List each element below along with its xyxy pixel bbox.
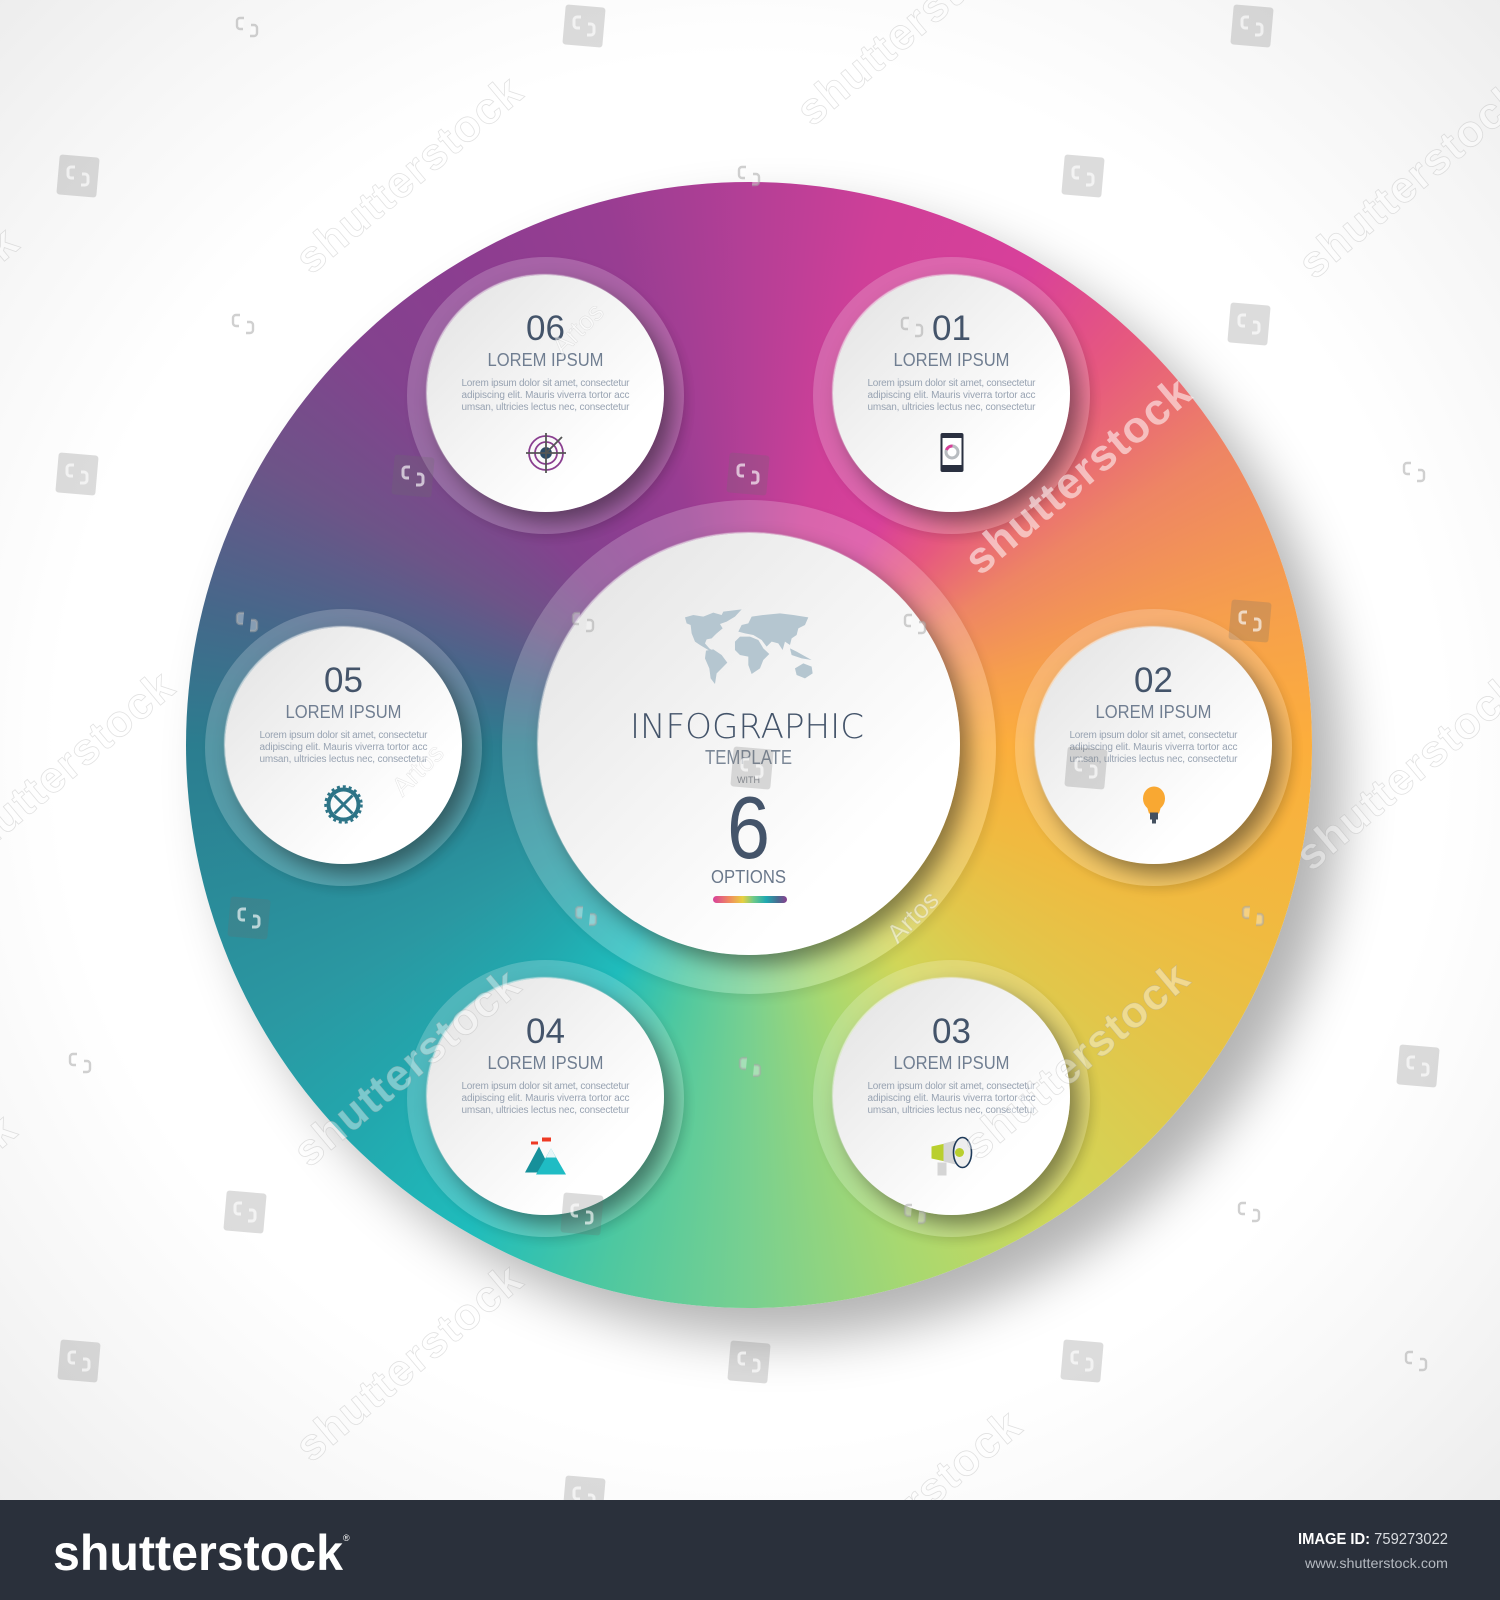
footer url: www.shutterstock.com [1304,1555,1448,1571]
watermark layer: shutterstock [286,1254,532,1471]
panel: option 01 [812,257,1090,534]
number 02: 02 [1134,660,1173,700]
footer logo registered mark: ® [343,1533,350,1543]
icon: target [526,433,566,473]
number 03: 03 [932,1012,970,1050]
body text 05: Lorem ipsum dolor sit amet, consectetur [259,730,428,740]
title: INFOGRAPHIC [630,707,864,747]
watermark layer: shutterstock [286,66,532,283]
watermark layer: Artos [386,738,450,802]
big number 6: 6 [727,778,770,877]
heading 05: LOREM IPSUM [285,702,401,722]
body text 02: Lorem ipsum dolor sit amet, consectetur [1070,730,1238,740]
body text 01 [867,378,1036,413]
panel: center circle [502,500,996,994]
icon: megaphone [931,1136,971,1175]
rainbow bar [713,896,787,903]
body text 03: Lorem ipsum dolor sit amet, consectetur [867,1080,1036,1092]
footer image id: IMAGE ID: 759273022 [1298,1531,1448,1548]
body text 06: umsan, ultricies lectus nec, consectetur [462,402,630,413]
watermark layer: Artos [881,885,945,949]
body text 03: adipiscing elit. Mauris viverra tortor acc [867,1092,1035,1104]
footer bar [0,1500,1500,1600]
subtitle: template: TEMPLATE [705,747,792,769]
body text 05: adipiscing elit. Mauris viverra tortor acc [259,742,427,752]
body text 04 [462,1080,630,1116]
text: options: OPTIONS [711,867,786,887]
icon: world map [685,609,813,684]
body text 01: Lorem ipsum dolor sit amet, consectetur [867,378,1036,389]
watermark layer: shutterstock [955,367,1201,584]
body text 04: umsan, ultricies lectus nec, consectetur [462,1104,630,1116]
body text 02: adipiscing elit. Mauris viverra tortor acc [1070,742,1238,752]
body text 03: umsan, ultricies lectus nec, consectetur [867,1104,1036,1116]
body text 06: Lorem ipsum dolor sit amet, consectetur [462,378,630,389]
text: with: WITH [737,775,760,786]
body text 04: Lorem ipsum dolor sit amet, consectetur [462,1080,630,1092]
body text 05 [259,730,428,764]
heading 04: LOREM IPSUM [488,1052,604,1072]
watermark layer: shutterstock [953,952,1199,1169]
panel: option 04 [407,960,684,1236]
watermark layer: shutterstock [284,959,530,1176]
heading 01: LOREM IPSUM [893,350,1009,370]
body text 01: adipiscing elit. Mauris viverra tortor acc [867,390,1035,401]
icon: mountains with flags [525,1137,566,1174]
icon: phone [940,433,963,472]
icon: light bulb [1143,786,1165,823]
number 04: 04 [526,1012,565,1050]
footer logo: shutterstock [53,1525,343,1581]
body text 02: umsan, ultricies lectus nec, consectetur [1070,754,1238,764]
body text 03 [867,1080,1036,1116]
heading 03: LOREM IPSUM [893,1052,1009,1072]
body text 06 [462,378,630,413]
watermark layer: Artos [546,297,610,361]
body text 02 [1070,730,1238,764]
body text 05: umsan, ultricies lectus nec, consectetur [259,754,428,764]
main gradient disc [186,182,1312,1308]
number 01: 01 [932,309,970,348]
body text 06: adipiscing elit. Mauris viverra tortor acc [462,390,630,401]
heading 06: LOREM IPSUM [488,350,604,370]
body text 01: umsan, ultricies lectus nec, consectetur [867,402,1036,413]
panel: option 06 [407,257,684,534]
panel: option 05 [204,608,482,886]
heading 02: LOREM IPSUM [1096,702,1212,722]
panel: option 03 [812,960,1090,1236]
panel: option 02 [1015,608,1292,886]
number 06: 06 [526,309,565,348]
number 05: 05 [324,660,362,700]
icon: gear [325,786,361,822]
body text 04: adipiscing elit. Mauris viverra tortor acc [462,1092,630,1104]
